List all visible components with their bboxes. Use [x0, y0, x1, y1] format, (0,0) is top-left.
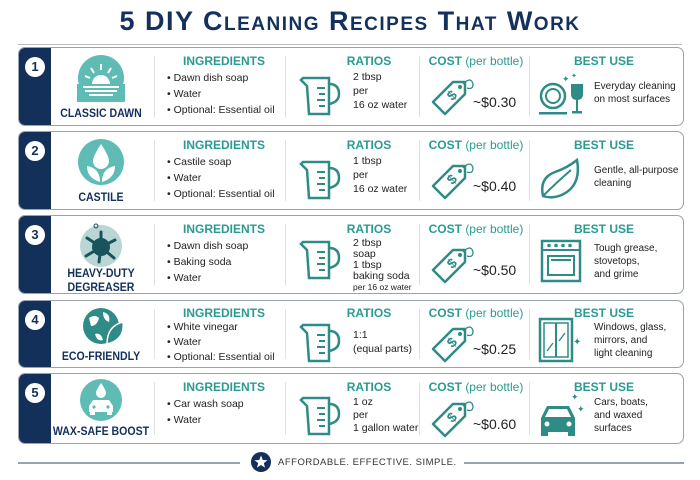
ratios: RATIOS [347, 380, 391, 394]
row 5: wax-safe boost: ~$0.60 [473, 416, 516, 432]
icon: grease splat [80, 224, 122, 267]
row 1: classic dawn: • Optional: Essential oil [167, 104, 275, 116]
ingredients: INGREDIENTS [183, 138, 265, 152]
row 3: heavy-duty degreaser: and grime [594, 269, 638, 280]
row 1: classic dawn: Everyday cleaning [594, 81, 676, 92]
row 5: wax-safe boost: ✦ [571, 392, 579, 402]
name: ECO-FRIENDLY [62, 349, 140, 363]
row 1: classic dawn: $ [443, 87, 460, 104]
row 4: eco-friendly: light cleaning [594, 348, 652, 359]
row 1: classic dawn: ✦ [571, 72, 577, 80]
best use: BEST USE [574, 138, 634, 152]
name: CASTILE [78, 190, 124, 204]
row 1: classic dawn: per [353, 85, 368, 97]
row 3: heavy-duty degreaser: per 16 oz water [353, 282, 412, 292]
row 1: classic dawn: • Dawn dish soap [167, 72, 248, 84]
row 3: heavy-duty degreaser: $ [443, 255, 460, 272]
best use: BEST USE [574, 306, 634, 320]
cost: COST (per bottle) [429, 306, 523, 320]
title: 5 DIY Cleaning Recipes That Work [119, 6, 581, 36]
row 4: eco-friendly: $ [443, 334, 460, 351]
icon: globe with leaf [83, 308, 122, 344]
row 5: wax-safe boost: • Car wash soap [167, 398, 244, 410]
number badge: 1 [31, 59, 39, 74]
cost: COST (per bottle) [429, 54, 523, 68]
row 2: castile: $ [443, 171, 460, 188]
cost: COST (per bottle) [429, 222, 523, 236]
name [67, 266, 135, 294]
row 1: classic dawn: 16 oz water [353, 99, 407, 111]
row 4: eco-friendly [18, 300, 684, 368]
row 3: heavy-duty degreaser: 1 tbsp [353, 259, 382, 271]
row 5: wax-safe boost: and waxed [594, 410, 642, 421]
row 1: classic dawn: on most surfaces [594, 94, 670, 105]
ratios: RATIOS [347, 138, 391, 152]
footer tagline [18, 452, 684, 472]
cost: COST (per bottle) [429, 138, 523, 152]
footer tagline: AFFORDABLE. EFFECTIVE. SIMPLE. [278, 457, 457, 468]
number badge: 2 [31, 143, 39, 158]
number badge [25, 225, 45, 245]
row 3: heavy-duty degreaser: stovetops, [594, 256, 640, 267]
row 1: classic dawn [18, 47, 684, 126]
icon: star badge [251, 452, 271, 472]
row 5: wax-safe boost [18, 373, 684, 444]
number badge: 3 [31, 227, 39, 242]
row 5: wax-safe boost: • Water [167, 414, 201, 426]
row 2: castile: • Optional: Essential oil [167, 188, 275, 200]
icon: sunrise [77, 55, 125, 102]
name: WAX-SAFE BOOST [53, 424, 149, 438]
row 2: castile: • Water [167, 172, 201, 184]
row 5: wax-safe boost: surfaces [594, 423, 632, 434]
row 2: castile: Gentle, all-purpose [594, 165, 678, 176]
ratios: RATIOS [347, 54, 391, 68]
row 4: eco-friendly: • Optional: Essential oil [167, 351, 275, 363]
row 5: wax-safe boost: 1 gallon water [353, 422, 418, 434]
row 4: eco-friendly: • Water [167, 336, 201, 348]
row 5: wax-safe boost: 1 oz [353, 396, 373, 408]
row 4: eco-friendly: Windows, glass, [594, 322, 666, 333]
row 4: eco-friendly: (equal parts) [353, 343, 412, 355]
row 3: heavy-duty degreaser: • Dawn dish soap [167, 240, 248, 252]
number badge [25, 141, 45, 161]
best use: BEST USE [574, 222, 634, 236]
icon: drop with car [80, 379, 122, 421]
name: CLASSIC DAWN [60, 106, 142, 120]
row 1: classic dawn: ✦ [562, 74, 570, 84]
number badge [25, 57, 45, 77]
row 2: castile: 16 oz water [353, 183, 407, 195]
icon: drop and leaves [78, 139, 124, 185]
row 5: wax-safe boost: $ [443, 409, 460, 426]
row 3: heavy-duty degreaser: 2 tbsp [353, 237, 382, 249]
row 2: castile: 1 tbsp [353, 155, 382, 167]
name: DEGREASER [68, 280, 134, 294]
row 3: heavy-duty degreaser: soap [353, 248, 376, 260]
row 4: eco-friendly: • White vinegar [167, 321, 238, 333]
ingredients: INGREDIENTS [183, 222, 265, 236]
row 2: castile: per [353, 169, 368, 181]
row 2: castile: • Castile soap [167, 156, 231, 168]
ingredients: INGREDIENTS [183, 54, 265, 68]
row 3: heavy-duty degreaser: • Water [167, 272, 201, 284]
ratios: RATIOS [347, 222, 391, 236]
row 3: heavy-duty degreaser [18, 215, 684, 294]
number badge [25, 310, 45, 330]
row 2: castile [18, 131, 684, 210]
row 4: eco-friendly: mirrors, and [594, 335, 647, 346]
row 5: wax-safe boost: ✦ [577, 404, 585, 414]
row 3: heavy-duty degreaser: Tough grease, [594, 243, 657, 254]
row 2: castile: ~$0.40 [473, 178, 516, 194]
cost: COST (per bottle) [429, 380, 523, 394]
row 5: wax-safe boost: Cars, boats, [594, 397, 648, 408]
ratios: RATIOS [347, 306, 391, 320]
number badge [25, 383, 45, 403]
row 1: classic dawn: ~$0.30 [473, 94, 516, 110]
best use: BEST USE [574, 54, 634, 68]
row 4: eco-friendly: 1:1 [353, 329, 368, 341]
row 4: eco-friendly: ✦ [573, 337, 581, 348]
ingredients: INGREDIENTS [183, 306, 265, 320]
row 3: heavy-duty degreaser: ~$0.50 [473, 262, 516, 278]
number badge: 4 [31, 312, 39, 327]
row 3: heavy-duty degreaser: • Baking soda [167, 256, 231, 268]
name: HEAVY-DUTY [67, 266, 135, 280]
row 2: castile: cleaning [594, 178, 631, 189]
row 1: classic dawn: • Water [167, 88, 201, 100]
row 5: wax-safe boost: per [353, 409, 368, 421]
best use: BEST USE [574, 380, 634, 394]
row 4: eco-friendly: ~$0.25 [473, 341, 516, 357]
row 1: classic dawn: 2 tbsp [353, 71, 382, 83]
row 3: heavy-duty degreaser: baking soda [353, 270, 410, 282]
ingredients: INGREDIENTS [183, 380, 265, 394]
number badge: 5 [31, 385, 39, 400]
